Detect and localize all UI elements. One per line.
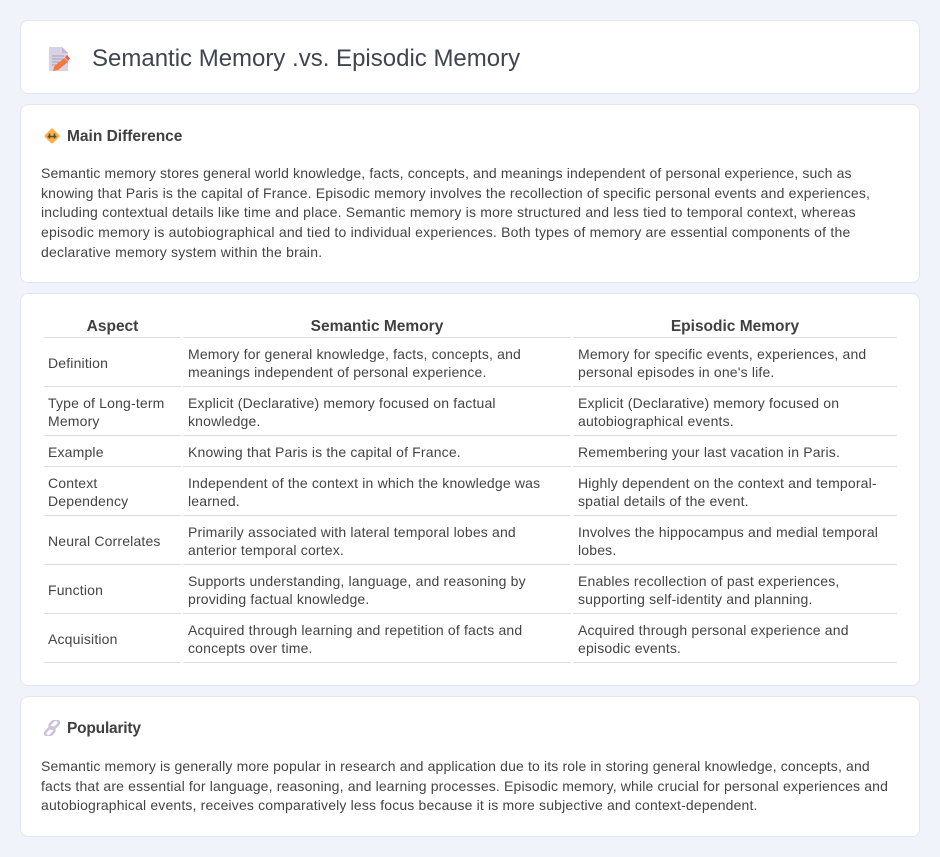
episodic definition: Memory for specific events, experiences, and xyxy=(578,346,866,362)
episodic example: Remembering your last vacation in Paris. xyxy=(578,444,840,460)
row: type of long-term memory xyxy=(48,394,165,429)
row: function: Function xyxy=(48,582,103,598)
row: context dependency: Dependency xyxy=(48,492,128,508)
text: main difference paragraph: episodic memory is autobiographical and tied to individual experiences. Both types of memory are essential components of the xyxy=(41,224,850,240)
episodic definition: personal episodes in one's life. xyxy=(578,364,774,380)
episodic context: spatial details of the event. xyxy=(578,492,749,508)
semantic type: Explicit (Declarative) memory focused on factual xyxy=(188,394,496,410)
row: type of long-term memory: Type of Long-term xyxy=(48,394,165,410)
semantic definition: Memory for general knowledge, facts, concepts, and xyxy=(188,346,521,362)
episodic neural: lobes. xyxy=(578,542,616,558)
episodic function xyxy=(578,572,839,607)
semantic neural xyxy=(188,524,516,558)
icon: orange diamond xyxy=(44,128,60,144)
semantic acquisition xyxy=(188,622,522,656)
icon: document with pencil xyxy=(49,47,70,71)
row: neural correlates: Neural Correlates xyxy=(48,532,161,548)
column header: episodic memory: Episodic Memory xyxy=(671,318,799,335)
semantic context: learned. xyxy=(188,492,240,508)
text: main difference paragraph: including contextual details like time and place. Semantic memory is more structured and less tied to temporal context, whereas xyxy=(41,204,856,220)
title: Semantic Memory .vs. Episodic Memory xyxy=(92,45,520,72)
text: main difference paragraph xyxy=(41,165,870,260)
heading: popularity: Popularity xyxy=(67,720,141,737)
semantic example: Knowing that Paris is the capital of France. xyxy=(188,444,461,460)
semantic type xyxy=(188,394,496,429)
semantic function xyxy=(188,572,526,607)
column header: semantic memory: Semantic Memory xyxy=(311,318,443,335)
text: popularity paragraph: Semantic memory is generally more popular in research and application due to its role in storing general knowledge, concepts, and xyxy=(41,758,870,774)
row: context dependency: Context xyxy=(48,474,97,490)
heading: main difference: Main Difference xyxy=(67,128,182,145)
row: example: Example xyxy=(48,444,104,460)
row: type of long-term memory: Memory xyxy=(48,412,100,428)
semantic definition: meanings independent of personal experience. xyxy=(188,364,487,380)
row: context dependency xyxy=(48,474,128,509)
text: popularity paragraph: autobiographical events, receives comparatively less focus because it is more subjective and context-dependent. xyxy=(41,797,758,813)
text: popularity paragraph: facts that are essential for language, reasoning, and learning processes. Episodic memory, while crucial for personal experiences and xyxy=(41,778,888,794)
semantic acquisition: concepts over time. xyxy=(188,640,313,656)
text: main difference paragraph: Semantic memory stores general world knowledge, facts, concepts, and meanings independent of personal experience, such as xyxy=(41,165,852,181)
episodic neural: Involves the hippocampus and medial temporal xyxy=(578,524,878,540)
semantic acquisition: Acquired through learning and repetition of facts and xyxy=(188,622,522,638)
semantic type: knowledge. xyxy=(188,412,261,428)
semantic context: Independent of the context in which the knowledge was xyxy=(188,474,540,490)
panel: popularity xyxy=(20,696,920,837)
episodic acquisition: Acquired through personal experience and xyxy=(578,622,849,638)
episodic function: supporting self-identity and planning. xyxy=(578,590,812,606)
text: popularity paragraph xyxy=(41,758,888,813)
episodic context: Highly dependent on the context and temporal- xyxy=(578,474,877,490)
panel: title header xyxy=(20,20,920,94)
text: main difference paragraph: knowing that Paris is the capital of France. Episodic memory involves the recollection of specific personal events and experiences, xyxy=(41,185,870,201)
semantic definition xyxy=(188,346,521,380)
column header: aspect: Aspect xyxy=(87,318,138,335)
semantic function: providing factual knowledge. xyxy=(188,590,369,606)
episodic function: Enables recollection of past experiences, xyxy=(578,572,839,588)
row: acquisition: Acquisition xyxy=(48,630,118,646)
episodic type: autobiographical events. xyxy=(578,412,734,428)
episodic definition xyxy=(578,346,866,380)
episodic type: Explicit (Declarative) memory focused on xyxy=(578,394,839,410)
icon: chain link xyxy=(44,720,60,736)
semantic neural: anterior temporal cortex. xyxy=(188,542,344,558)
row: definition: Definition xyxy=(48,354,108,370)
episodic context xyxy=(578,474,877,509)
semantic neural: Primarily associated with lateral temporal lobes and xyxy=(188,524,516,540)
text: main difference paragraph: declarative memory system within the brain. xyxy=(41,244,322,260)
semantic function: Supports understanding, language, and reasoning by xyxy=(188,572,526,588)
semantic context xyxy=(188,474,540,508)
episodic acquisition: episodic events. xyxy=(578,640,681,656)
panel: comparison table card xyxy=(20,293,920,686)
episodic type xyxy=(578,394,839,429)
episodic neural xyxy=(578,524,878,558)
episodic acquisition xyxy=(578,622,849,656)
panel: main difference xyxy=(20,104,920,283)
